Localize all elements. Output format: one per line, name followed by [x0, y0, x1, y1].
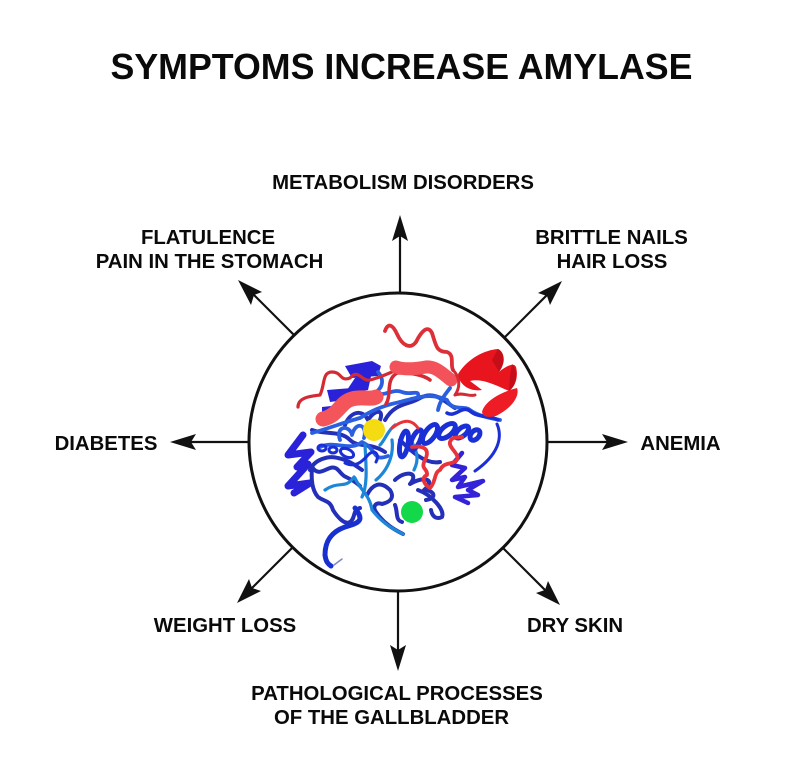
label: pathological processes of the gallbladder: OF THE GALLBLADDER — [274, 707, 509, 729]
label: dry skin: DRY SKIN — [527, 615, 623, 637]
label: diabetes: DIABETES — [55, 433, 157, 455]
arrow: down — [390, 592, 406, 671]
label: brittle nails, hair loss — [535, 227, 688, 273]
blue helix, right — [398, 409, 498, 457]
blue beta sheets, top left — [322, 361, 381, 412]
arrow: left — [170, 434, 248, 450]
small coil loops, left — [318, 445, 377, 465]
title: SYMPTOMS INCREASE AMYLASE — [110, 47, 693, 87]
arrow: down-right — [503, 548, 560, 605]
arrow: down-left — [237, 548, 292, 603]
arrow: right — [548, 434, 628, 450]
red lower loops — [412, 437, 462, 488]
light blue tubes — [325, 425, 417, 534]
arrow: up-left — [238, 280, 295, 336]
arrow: up — [392, 215, 408, 293]
amylase protein structure — [288, 326, 518, 566]
right blue zigzag — [452, 453, 483, 503]
label: weight loss: WEIGHT LOSS — [154, 615, 296, 637]
yellow sphere — [363, 419, 385, 441]
label: metabolism disorders: METABOLISM DISORDERS — [272, 172, 534, 194]
green sphere — [401, 501, 423, 523]
label: flatulence, pain in the stomach: FLATULENCE — [141, 227, 275, 249]
circle — [249, 293, 547, 591]
label: pathological processes of the gallbladder — [251, 683, 543, 729]
back coils dark — [310, 395, 455, 534]
arrow: up-right — [504, 281, 562, 338]
red thin ribbons — [385, 326, 453, 370]
thick red helices — [323, 397, 376, 419]
label: brittle nails, hair loss: HAIR LOSS — [557, 251, 667, 273]
label: anemia: ANEMIA — [640, 433, 721, 455]
label: flatulence, pain in the stomach: PAIN IN THE STOMACH — [96, 251, 323, 273]
red sheet cluster — [458, 349, 517, 391]
blue arc, right — [475, 424, 499, 471]
left blue zigzag — [288, 435, 311, 493]
label: pathological processes of the gallbladder: PATHOLOGICAL PROCESSES — [251, 683, 543, 705]
blue tail — [325, 508, 360, 566]
label: brittle nails, hair loss: BRITTLE NAILS — [535, 227, 688, 249]
label: flatulence, pain in the stomach — [96, 227, 323, 273]
blue tubes mid — [312, 372, 500, 458]
